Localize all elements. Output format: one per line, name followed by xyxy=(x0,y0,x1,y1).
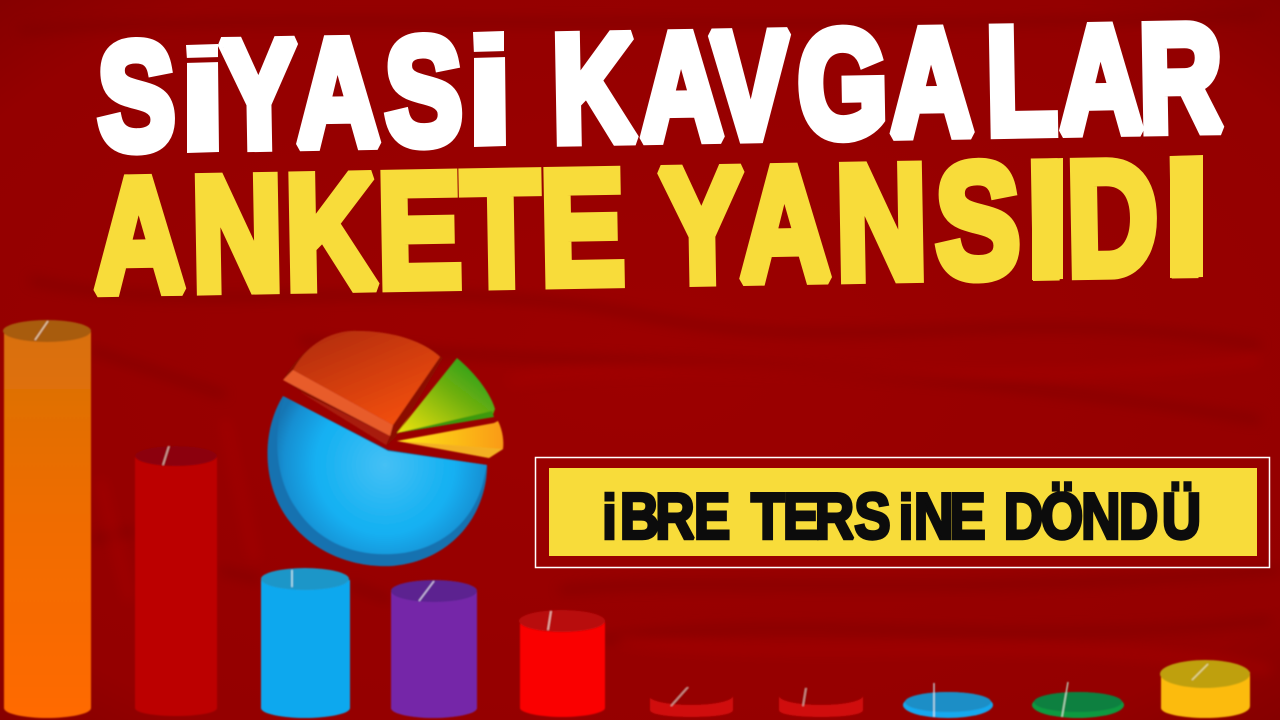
bar: small green cylinder xyxy=(1032,682,1124,718)
pie slice: red xyxy=(283,331,443,445)
bar: small red cylinder 2 xyxy=(779,687,863,717)
title: yellow line: ANKETE YANSIDI xyxy=(92,125,1203,326)
bar: orange cylinder xyxy=(3,320,91,718)
callout banner: iBRE TERSiNE DÖNDÜ xyxy=(602,480,1201,553)
bar: small blue cylinder xyxy=(903,683,993,718)
pie slice: yellow xyxy=(397,421,503,458)
bar: purple cylinder xyxy=(391,580,477,718)
pie chart xyxy=(267,331,503,566)
bar: small red cylinder 1 xyxy=(649,687,733,717)
bar: dark red cylinder xyxy=(135,446,217,716)
callout banner xyxy=(536,458,1270,568)
bar: yellow cylinder xyxy=(1160,660,1250,718)
pie slice: green xyxy=(397,358,495,433)
bar: blue cylinder xyxy=(261,568,350,718)
pie slice: blue xyxy=(267,396,487,566)
bar: red cylinder xyxy=(519,610,605,717)
